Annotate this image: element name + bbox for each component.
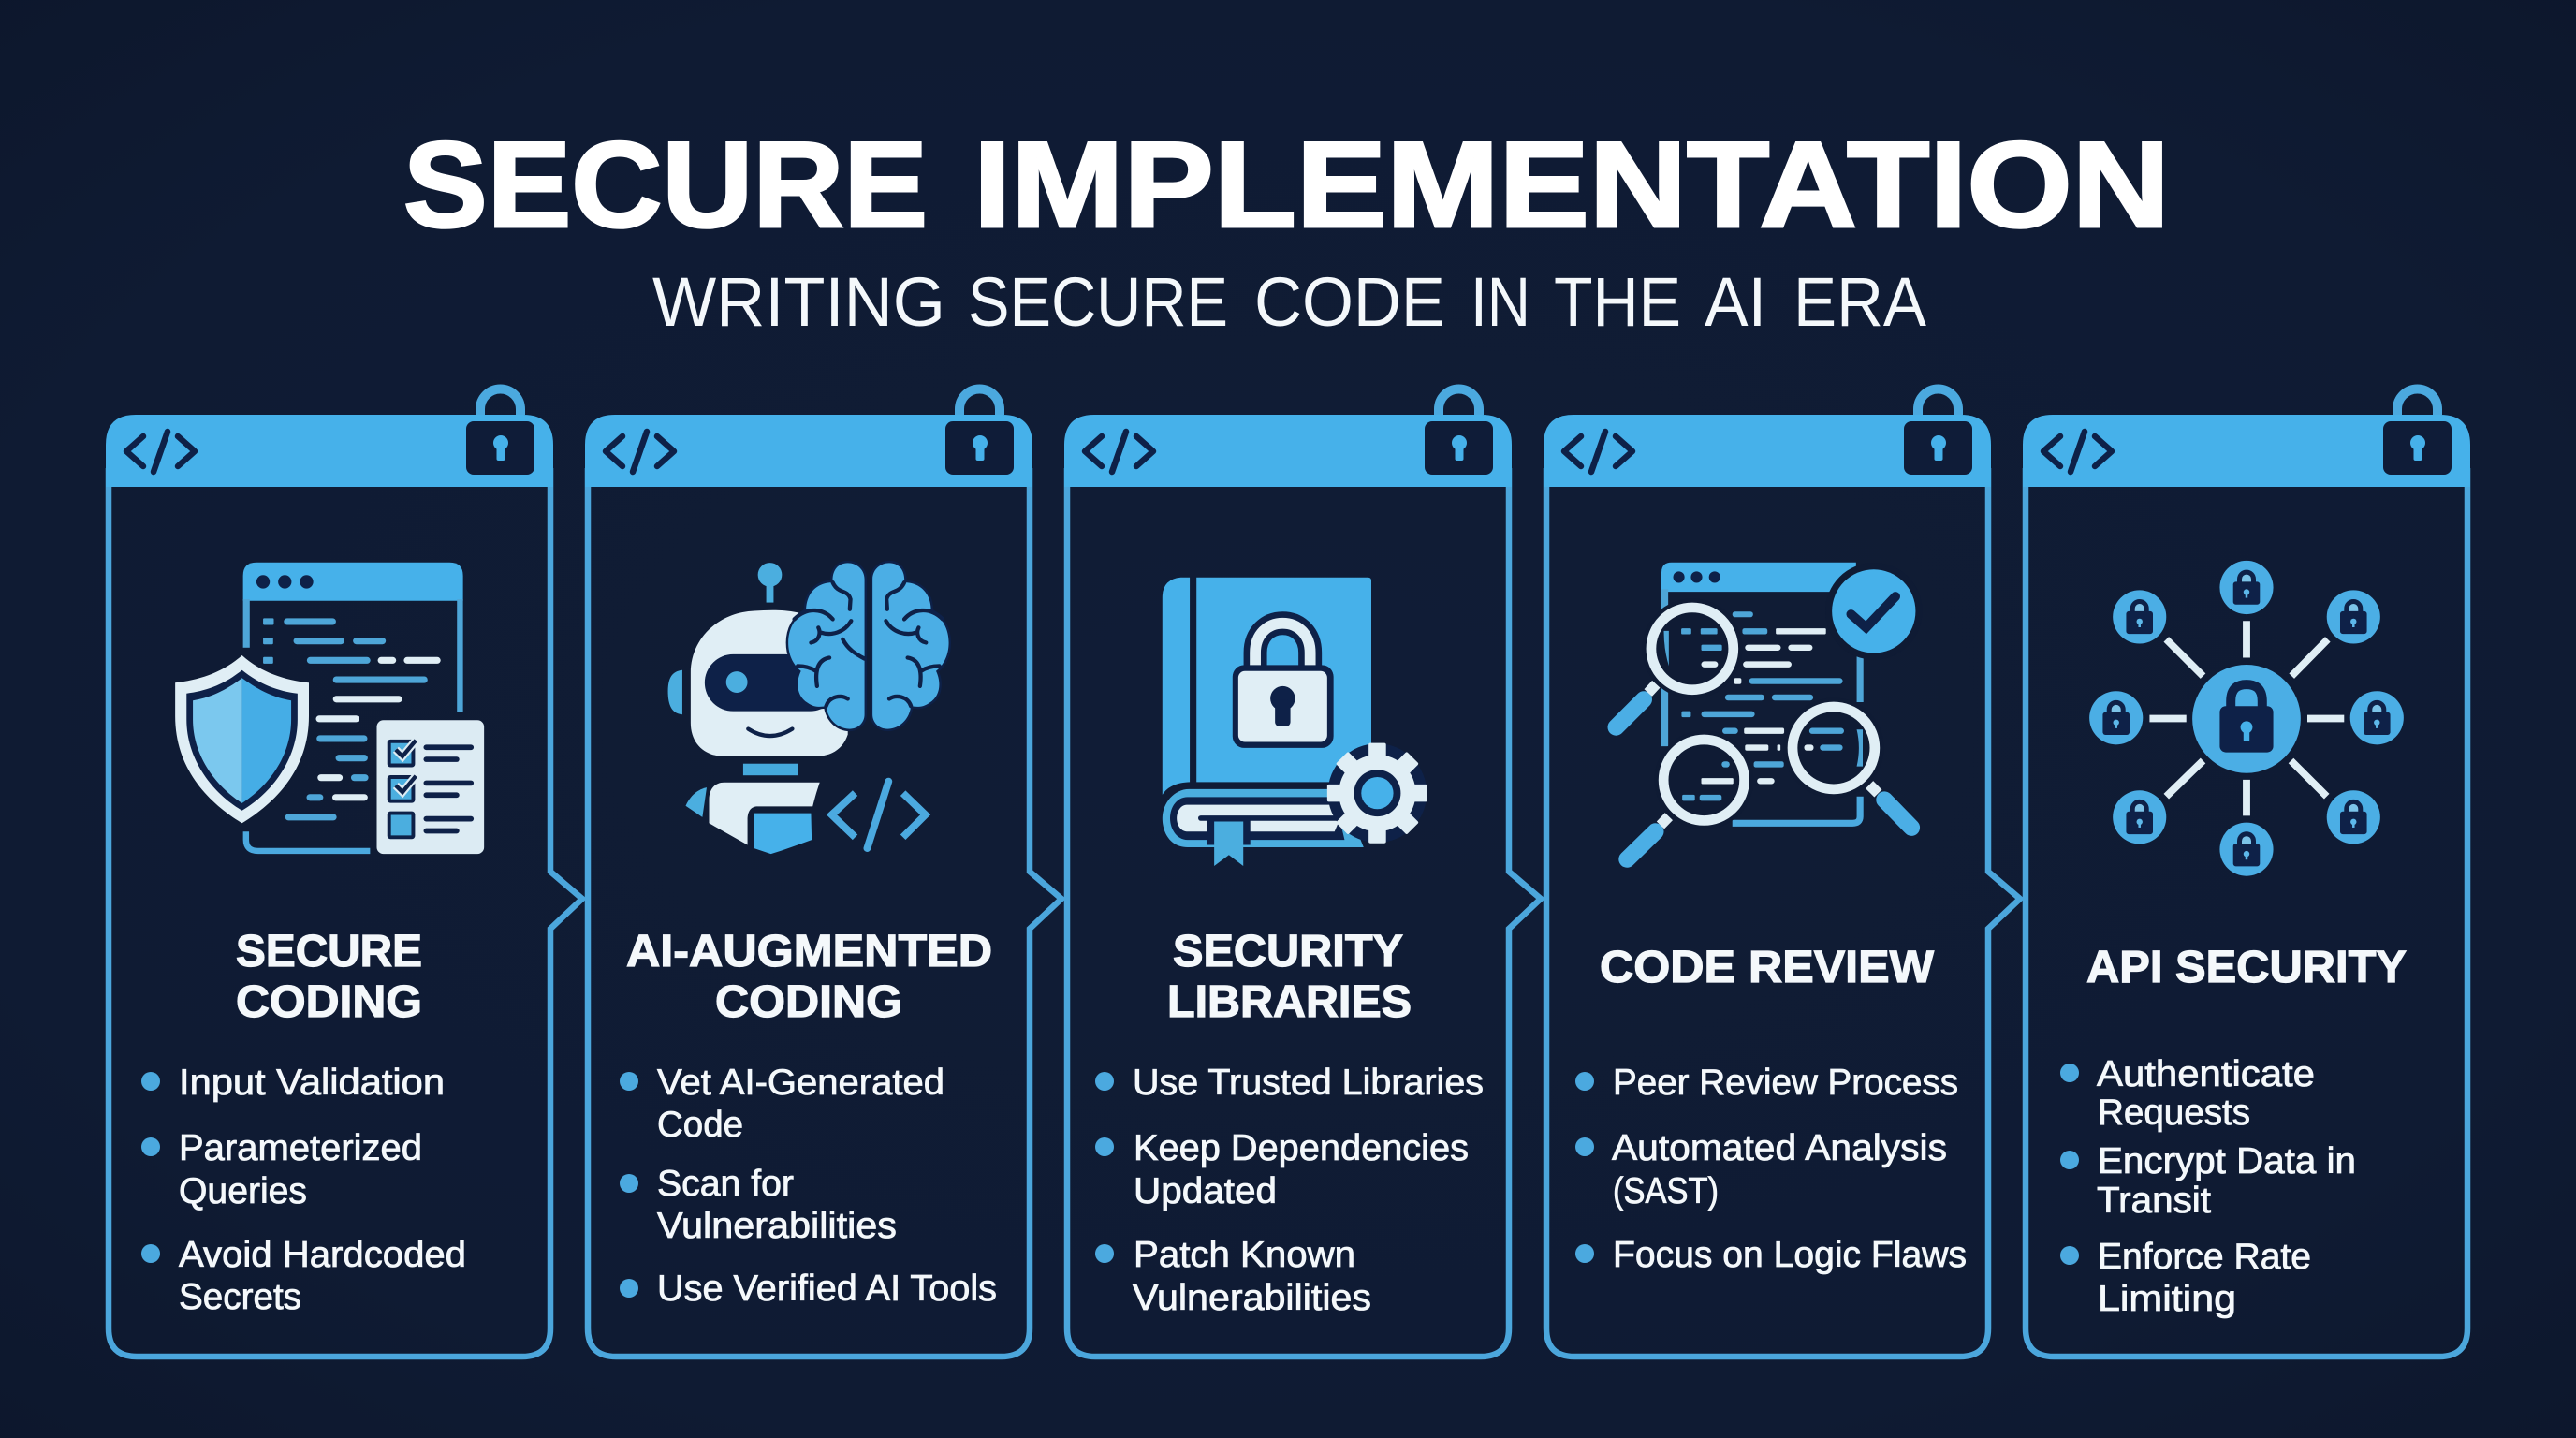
bullet: authenticate requests: Authenticate <box>2097 1054 2315 1094</box>
panel: security libraries <box>1064 389 1541 1357</box>
bullet: scan for vulnerabilities <box>620 1164 897 1246</box>
bullet: input validation: Input Validation <box>179 1063 445 1103</box>
panel: code review <box>1544 389 2020 1357</box>
icon: locked book with gear <box>1163 578 1427 866</box>
bullet: avoid hardcoded secrets: Secrets <box>179 1277 301 1317</box>
bullet: authenticate requests <box>2060 1054 2315 1133</box>
bullet: use verified AI tools: Use Verified AI Tools <box>657 1269 997 1309</box>
panel title: API SECURITY <box>2086 943 2407 992</box>
bullet: avoid hardcoded secrets: Avoid Hardcoded <box>179 1235 466 1275</box>
bullet: parameterized queries <box>141 1128 422 1211</box>
panel header with code glyph and lock <box>2023 389 2470 487</box>
bullet: avoid hardcoded secrets <box>141 1235 466 1317</box>
bullet: keep dependencies updated: Keep Dependencies <box>1134 1128 1469 1168</box>
bullet: enforce rate limiting: Enforce Rate <box>2098 1237 2311 1277</box>
panel title: CODING <box>236 977 422 1027</box>
panel header with code glyph and lock <box>1544 389 1991 487</box>
panel title: CODE REVIEW <box>1600 943 1935 992</box>
panel title: SECURE <box>236 927 422 976</box>
bullet: enforce rate limiting: Limiting <box>2098 1279 2236 1319</box>
panel title <box>626 927 992 1027</box>
panel frame <box>2026 468 2467 1357</box>
icon: shield, code window and checklist <box>175 563 484 854</box>
icon: network of locks <box>2089 561 2404 876</box>
panel title <box>236 927 422 1027</box>
bullet: automated analysis <box>1575 1128 1947 1211</box>
bullet: automated analysis: Automated Analysis <box>1612 1128 1947 1168</box>
panel frame <box>1546 468 2020 1357</box>
subtitle <box>652 263 1927 341</box>
panel title: SECURITY <box>1173 927 1403 976</box>
panel frame <box>1067 468 1541 1357</box>
bullet: scan for vulnerabilities: Scan for <box>657 1164 794 1204</box>
bullet: keep dependencies updated <box>1095 1128 1469 1211</box>
bullet: automated analysis: (SAST) <box>1613 1171 1719 1211</box>
subtitle: ERA <box>1793 263 1927 341</box>
bullet: use trusted libraries: Use Trusted Libraries <box>1133 1063 1484 1103</box>
panel header with code glyph and lock <box>1064 389 1512 487</box>
subtitle: SECURE <box>968 263 1228 341</box>
panel: secure coding <box>106 389 582 1357</box>
panel: API security <box>2023 389 2470 1357</box>
bullet: focus on logic flaws: Focus on Logic Flaws <box>1613 1235 1967 1275</box>
bullet: vet AI-generated code: Code <box>657 1105 743 1145</box>
panel frame <box>109 468 582 1357</box>
panel header with code glyph and lock <box>585 389 1032 487</box>
subtitle: THE <box>1554 263 1681 341</box>
bullet: patch known vulnerabilities: Patch Known <box>1134 1235 1355 1275</box>
bullet: patch known vulnerabilities: Vulnerabilities <box>1133 1278 1371 1318</box>
bullet: encrypt data in transit: Transit <box>2097 1181 2211 1221</box>
bullet: authenticate requests: Requests <box>2098 1093 2250 1133</box>
bullet: encrypt data in transit: Encrypt Data in <box>2098 1141 2356 1181</box>
panel title: CODING <box>715 977 902 1027</box>
panel frame <box>588 468 1061 1357</box>
bullet: scan for vulnerabilities: Vulnerabilities <box>657 1206 897 1246</box>
bullet: patch known vulnerabilities <box>1095 1235 1371 1318</box>
subtitle: AI <box>1705 263 1766 341</box>
bullet: encrypt data in transit <box>2060 1141 2356 1221</box>
bullet: enforce rate limiting <box>2060 1237 2311 1319</box>
subtitle: CODE <box>1254 263 1445 341</box>
bullet: vet AI-generated code <box>620 1063 944 1145</box>
bullet: peer review process: Peer Review Process <box>1613 1063 1958 1103</box>
subtitle: IN <box>1471 263 1530 341</box>
subtitle: WRITING <box>652 263 945 341</box>
bullet: parameterized queries: Parameterized <box>179 1128 422 1168</box>
panel title: LIBRARIES <box>1167 977 1412 1027</box>
icon: robot with brain and code <box>668 563 949 854</box>
title: SECURE <box>403 116 928 253</box>
bullet: vet AI-generated code: Vet AI-Generated <box>657 1063 944 1103</box>
icon: magnifiers over code window with check badge <box>1616 563 1923 859</box>
title: IMPLEMENTATION <box>973 116 2170 253</box>
panel title <box>1167 927 1412 1027</box>
panel header with code glyph and lock <box>106 389 553 487</box>
bullet: parameterized queries: Queries <box>179 1171 307 1211</box>
panel title: AI-AUGMENTED <box>626 927 992 976</box>
panel: AI-augmented coding <box>585 389 1061 1357</box>
title <box>403 116 2170 253</box>
bullet: keep dependencies updated: Updated <box>1134 1171 1277 1211</box>
